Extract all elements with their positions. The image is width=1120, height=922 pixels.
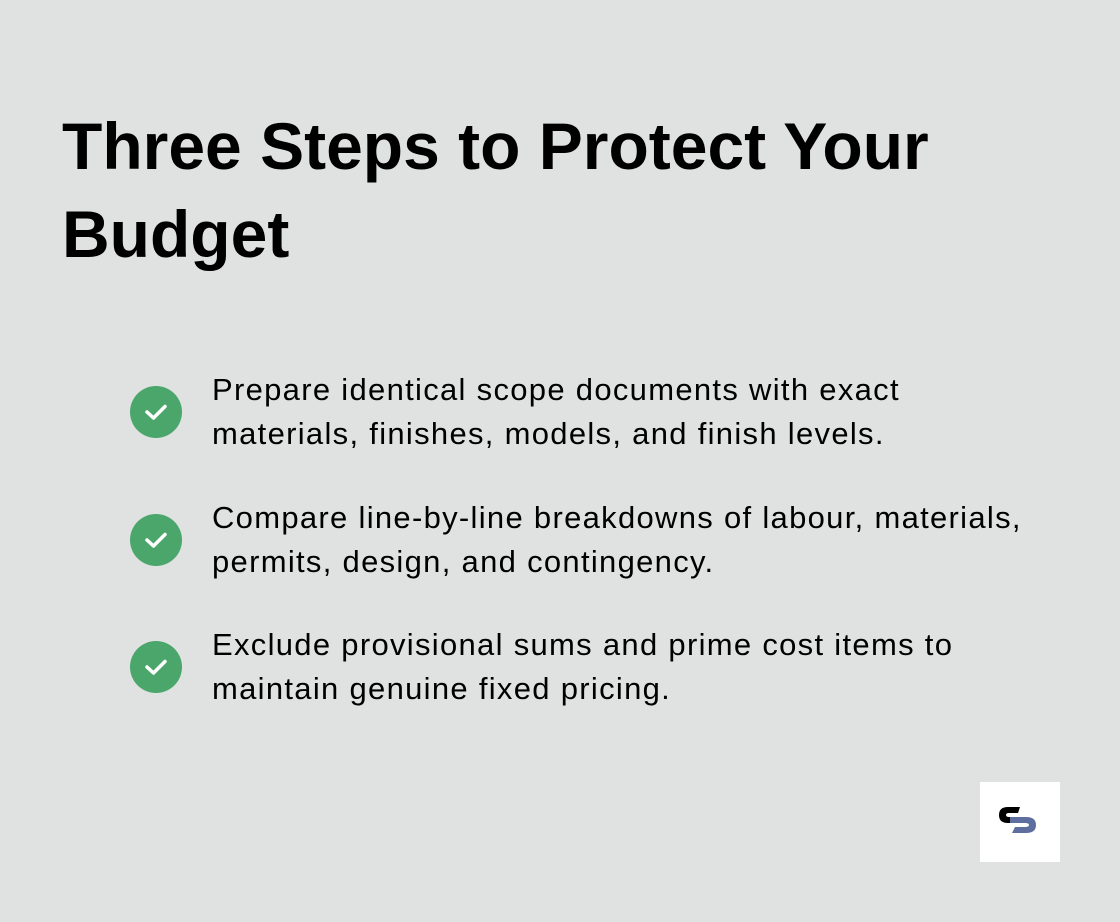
text: materials, finishes, models, and finish levels. [212, 416, 885, 451]
logo [980, 782, 1060, 862]
text: Compare line-by-line breakdowns of labour, materials, [212, 500, 1022, 535]
icon: check [130, 514, 182, 566]
text: Prepare identical scope documents with exact [212, 372, 900, 407]
icon: check [130, 386, 182, 438]
icon: check [130, 641, 182, 693]
text [212, 500, 1022, 579]
text: maintain genuine fixed pricing. [212, 671, 671, 706]
text: permits, design, and contingency. [212, 544, 714, 579]
title: Three Steps to Protect Your [62, 109, 929, 183]
title: Budget [62, 197, 289, 271]
title [62, 109, 929, 271]
step 3 [130, 627, 953, 706]
step 1 [130, 372, 900, 451]
text: Exclude provisional sums and prime cost items to [212, 627, 953, 662]
step 2 [130, 500, 1022, 579]
text [212, 627, 953, 706]
text [212, 372, 900, 451]
